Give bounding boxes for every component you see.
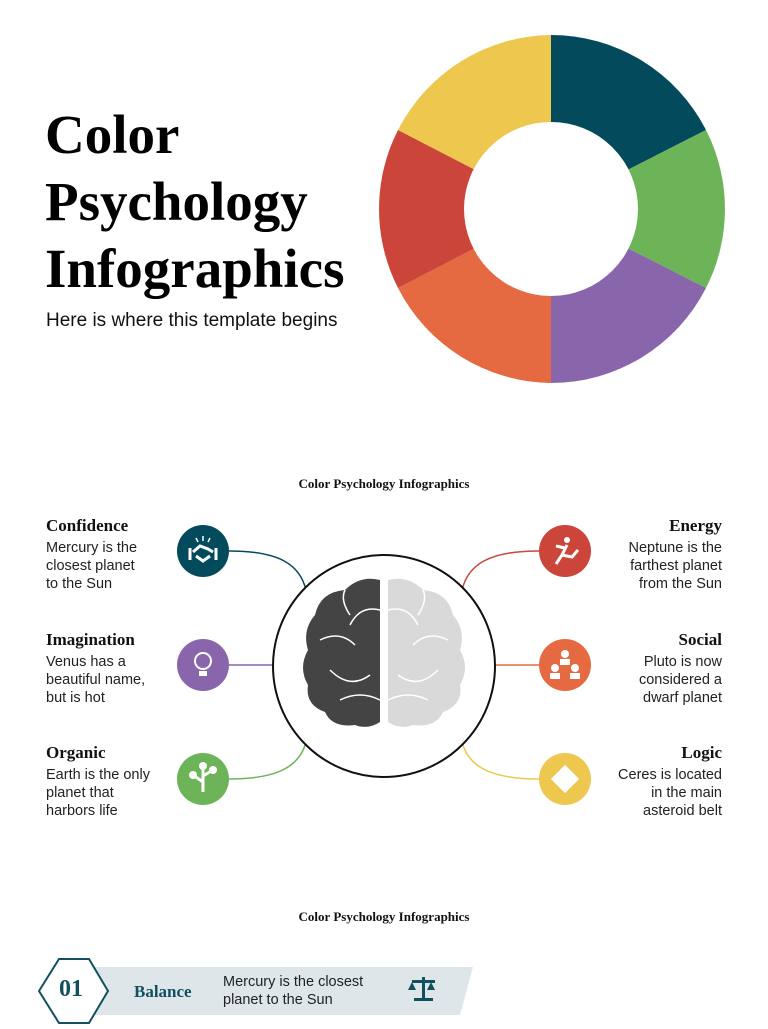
item: logic: Logic bbox=[681, 743, 722, 762]
icon: confidence bbox=[177, 525, 229, 577]
brain bbox=[303, 579, 465, 727]
label: Balance bbox=[134, 982, 192, 1001]
title bbox=[45, 104, 344, 299]
item: social: Social bbox=[679, 630, 722, 649]
item: imagination bbox=[46, 630, 145, 706]
icon: imagination bbox=[177, 639, 229, 691]
icon: logic bbox=[539, 753, 591, 805]
icon: organic bbox=[177, 753, 229, 805]
item: organic: planet that bbox=[46, 785, 114, 801]
item: organic: Earth is the only bbox=[46, 767, 150, 783]
item: confidence: Mercury is the bbox=[46, 540, 137, 556]
item: energy bbox=[628, 516, 722, 592]
item: energy: Energy bbox=[669, 516, 722, 535]
subtitle: Here is where this template begins bbox=[46, 310, 337, 331]
item: social: Pluto is now considered a dwarf planet bbox=[639, 654, 722, 706]
item: imagination: Venus has a bbox=[46, 654, 126, 670]
icon: energy bbox=[539, 525, 591, 577]
item: energy: Neptune is the farthest planet from the Sun bbox=[628, 540, 722, 592]
item: confidence: closest planet bbox=[46, 558, 135, 574]
item: imagination: Imagination bbox=[46, 630, 135, 649]
section heading 2: Color Psychology Infographics bbox=[299, 909, 469, 924]
item: organic: Organic bbox=[46, 743, 106, 762]
icon: social bbox=[539, 639, 591, 691]
item: imagination: beautiful name, bbox=[46, 672, 145, 688]
item: confidence: to the Sun bbox=[46, 576, 112, 592]
number: 01 bbox=[59, 976, 83, 1002]
balance banner bbox=[38, 958, 473, 1024]
item: logic: Ceres is located in the main asteroid belt bbox=[618, 767, 722, 819]
item: social bbox=[639, 630, 722, 706]
section heading 1: Color Psychology Infographics bbox=[299, 476, 469, 491]
item: confidence bbox=[46, 516, 137, 592]
item: confidence: Confidence bbox=[46, 516, 128, 535]
title: Color bbox=[45, 104, 179, 165]
item: organic bbox=[46, 743, 150, 819]
title: Infographics bbox=[45, 238, 344, 299]
text: Mercury is the closest planet to the Sun bbox=[223, 974, 363, 1008]
item: organic: harbors life bbox=[46, 803, 118, 819]
item: imagination: but is hot bbox=[46, 690, 105, 706]
item: logic bbox=[618, 743, 722, 819]
title: Psychology bbox=[45, 171, 308, 232]
